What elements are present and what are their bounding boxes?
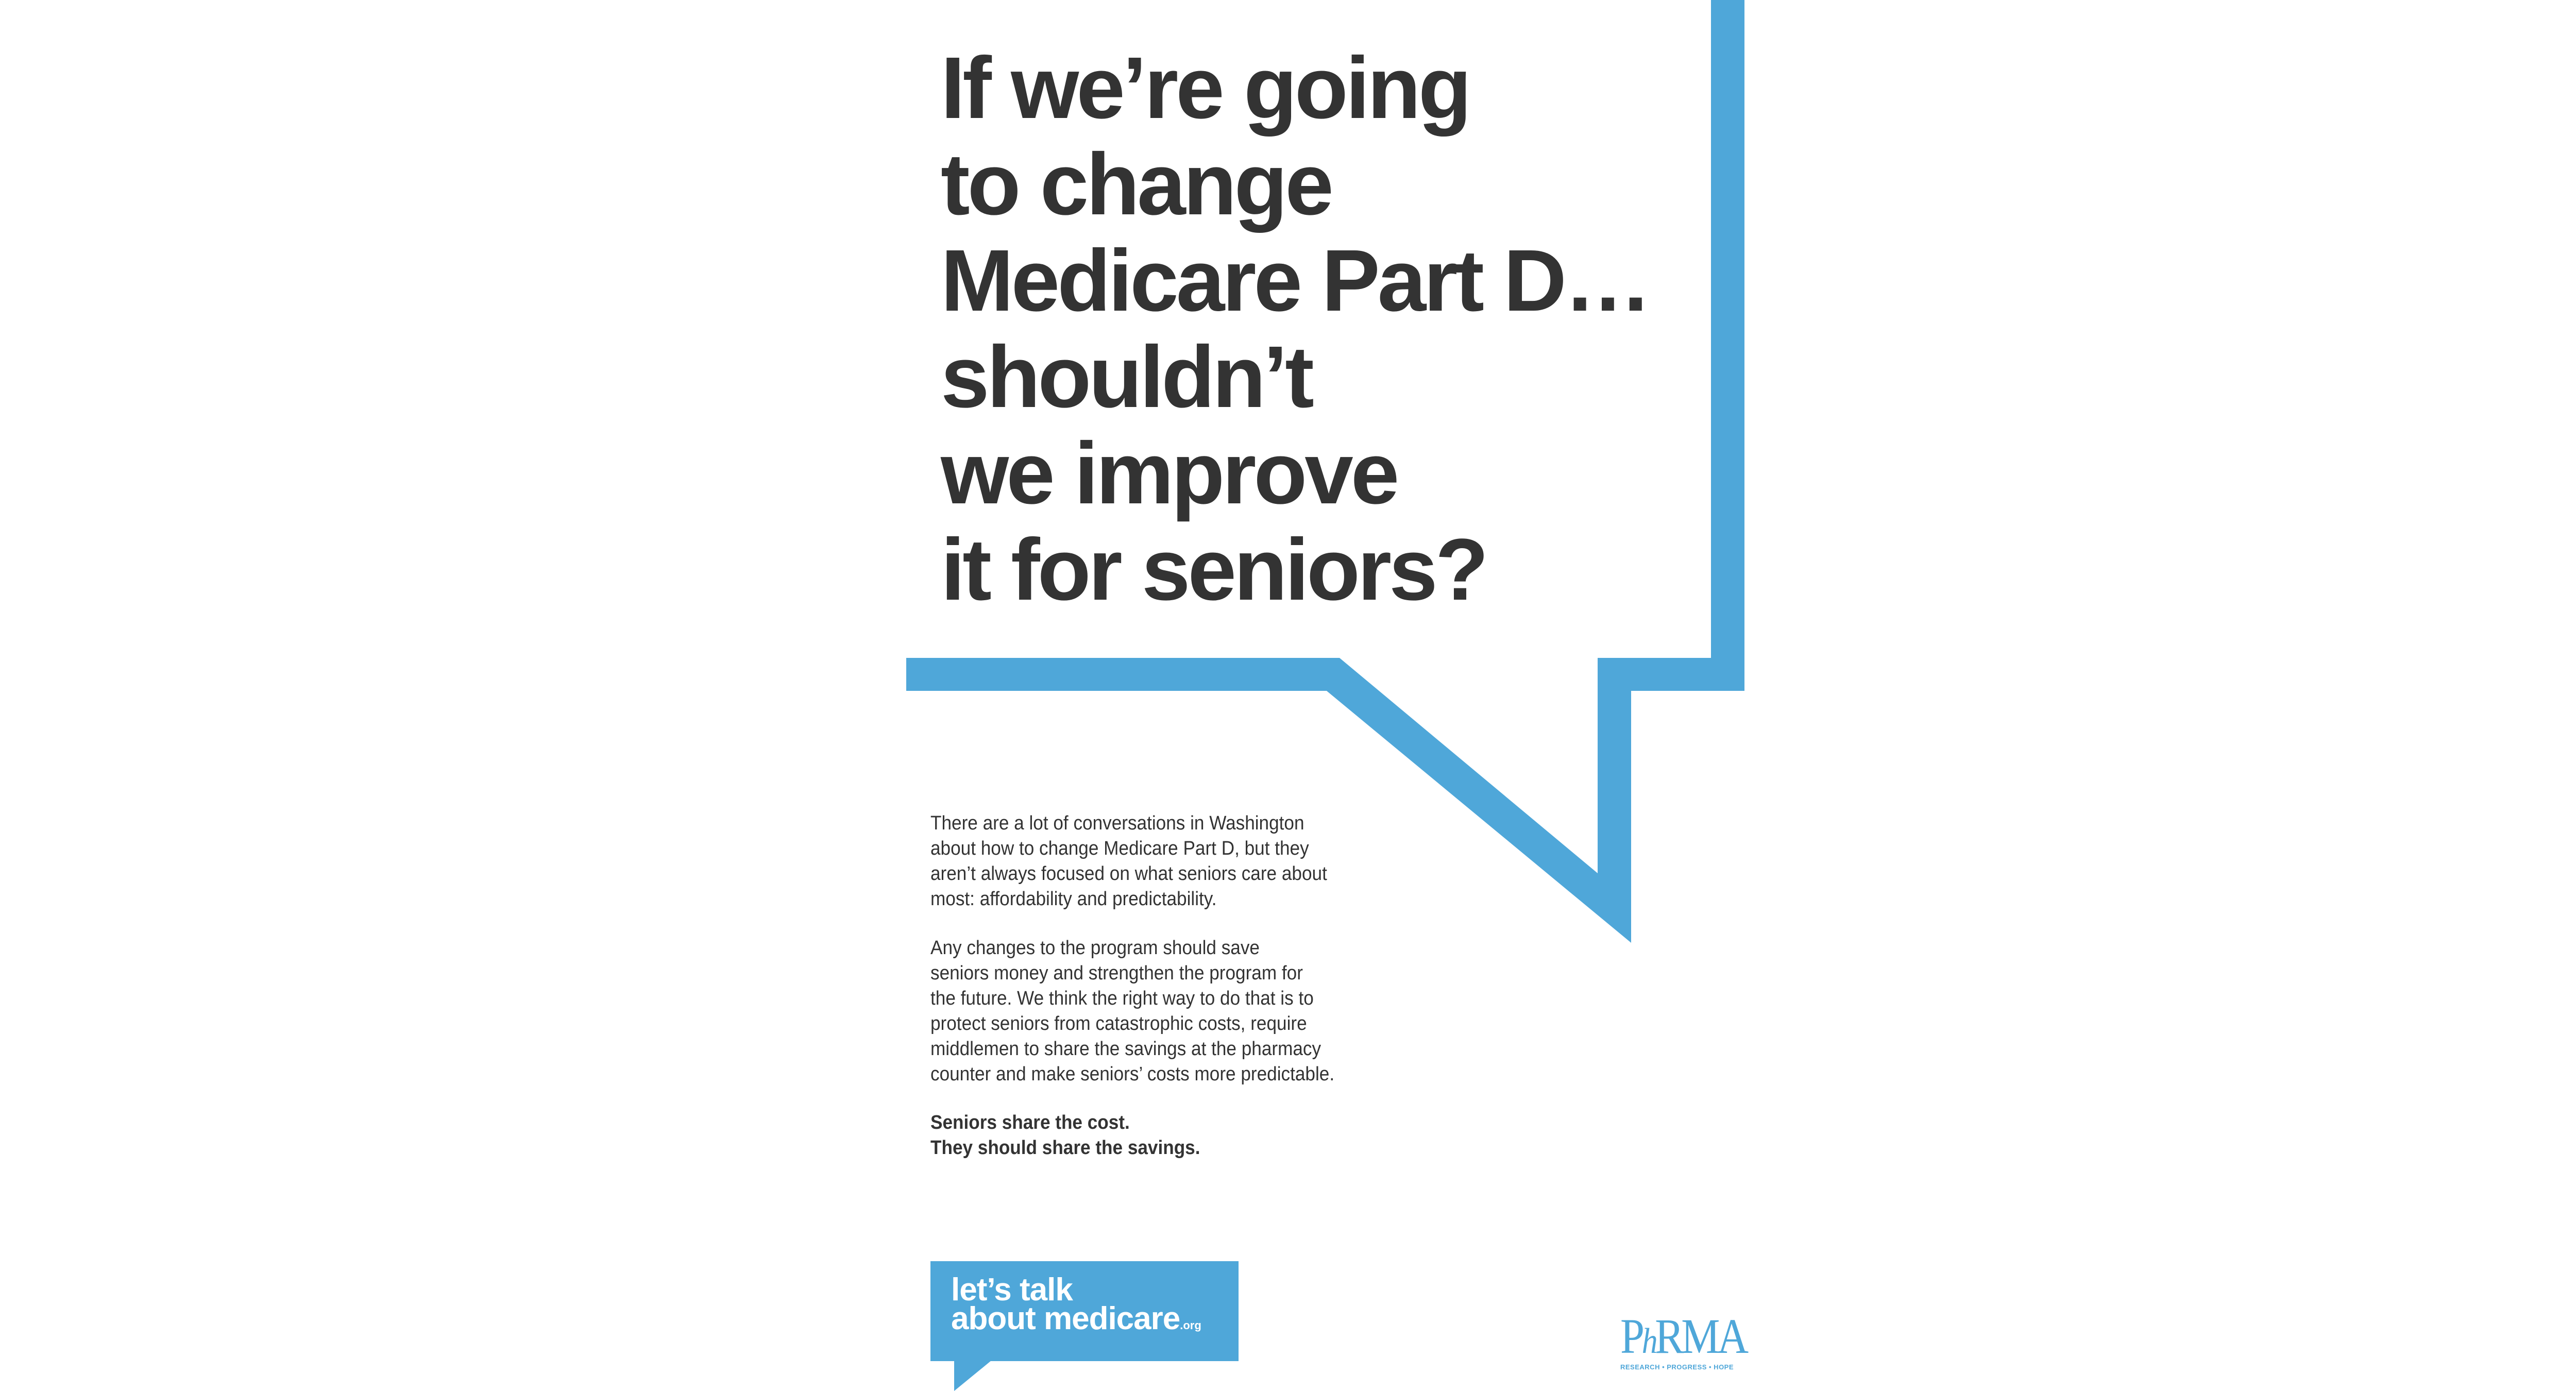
title: to change <box>941 135 1331 233</box>
text block: tagline: They should share the savings. <box>930 1137 1200 1159</box>
logo: let's talk about medicare: about medicare.org <box>951 1301 1201 1336</box>
text block: intro: There are a lot of conversations in Washington <box>930 812 1304 834</box>
text block: tagline <box>930 1112 1200 1159</box>
title <box>941 39 1649 619</box>
title: If we’re going <box>941 39 1469 137</box>
text block: intro <box>930 812 1327 910</box>
text block: proposal <box>930 937 1334 1085</box>
text block: proposal: seniors money and strengthen the program for <box>930 962 1303 984</box>
text block: proposal: counter and make seniors’ costs more predictable. <box>930 1063 1334 1085</box>
text block: proposal: Any changes to the program should save <box>930 937 1260 959</box>
title: Medicare Part D… <box>941 232 1649 330</box>
text block: intro: most: affordability and predictability. <box>930 888 1217 910</box>
text block: proposal: protect seniors from catastrophic costs, require <box>930 1013 1307 1034</box>
logo: let's talk about medicare <box>930 1261 1239 1391</box>
text block: intro: aren’t always focused on what seniors care about <box>930 863 1327 885</box>
text block: intro: about how to change Medicare Part D, but they <box>930 838 1309 859</box>
logo: PhRMA: PhRMA <box>1620 1309 1746 1364</box>
text block: tagline: Seniors share the cost. <box>930 1112 1130 1133</box>
title: shouldn’t <box>941 328 1312 426</box>
text block: proposal: the future. We think the right way to do that is to <box>930 988 1314 1009</box>
logo: let's talk about medicare: let’s talk <box>951 1272 1073 1308</box>
text: RESEARCH • PROGRESS • HOPE <box>1620 1363 1734 1371</box>
title: it for seniors? <box>941 521 1486 619</box>
title: we improve <box>941 425 1397 522</box>
text block: proposal: middlemen to share the savings at the pharmacy <box>930 1038 1321 1060</box>
